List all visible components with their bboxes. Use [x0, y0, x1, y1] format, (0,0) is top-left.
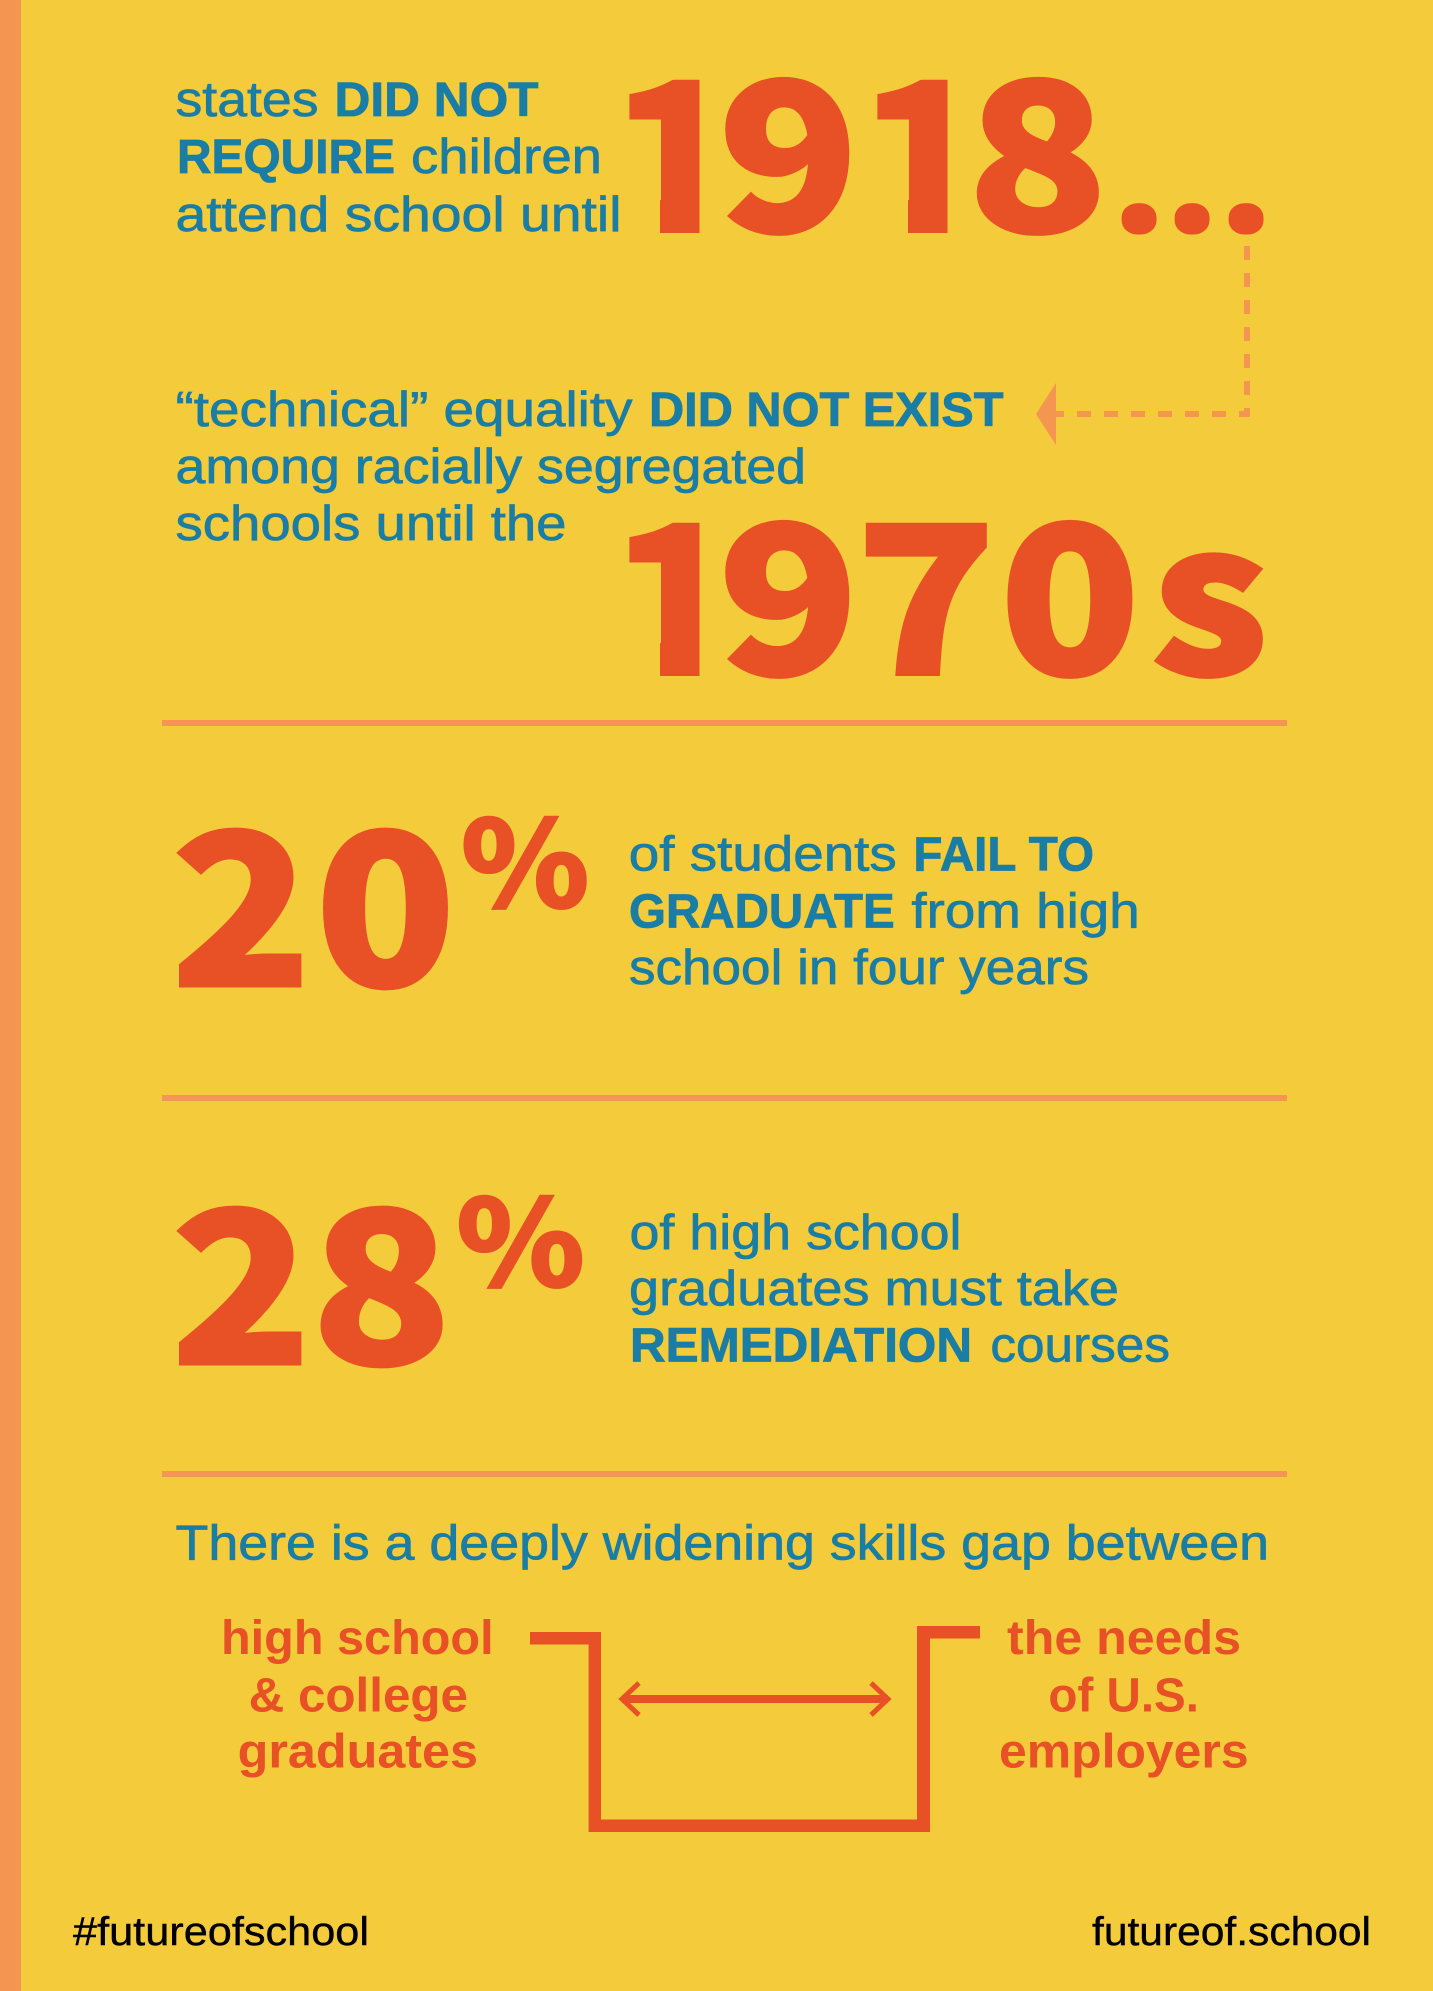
label: high school and college graduates: [221, 1612, 494, 1778]
big number: 1918: 1: [608, 0, 749, 292]
stat: 20 percent: 20: [171, 747, 456, 1046]
text: states did not require children attend school until: children: [411, 130, 602, 184]
text: 28 percent of graduates must take remediation: graduates must take: [629, 1262, 1119, 1316]
text: 20 percent of students fail to graduate: GRADUATE: [629, 886, 895, 939]
gap bracket: [530, 1626, 980, 1832]
text: 20 percent of students fail to graduate: [629, 828, 1140, 995]
label: high school and college graduates: & college: [249, 1670, 468, 1723]
text: 20 percent of students fail to graduate: of students: [629, 828, 897, 882]
text: technical equality did not exist among racially segregated schools until the: among racially segregated: [176, 440, 806, 494]
label: the needs of U.S. employers: of U.S.: [1048, 1670, 1199, 1723]
text: 28 percent of graduates must take remediation: [629, 1206, 1170, 1373]
text: states did not require children attend school until: [176, 73, 622, 242]
big number: 1970s: 970s: [718, 435, 1268, 735]
divider: [162, 720, 1287, 726]
text: 20 percent of students fail to graduate: from high: [911, 885, 1140, 939]
text: 28 percent of graduates must take remediation: REMEDIATION: [630, 1320, 972, 1373]
text: states did not require children attend school until: states: [176, 73, 318, 127]
big number: 1918: 9: [718, 0, 859, 292]
ellipsis dots: ...: [1136, 201, 1249, 225]
big number: 1970s: [629, 520, 1264, 679]
stat: 20 percent: %: [461, 769, 590, 943]
stat: 28 percent: %: [456, 1148, 585, 1322]
text: technical equality did not exist among racially segregated schools until the: DID NOT EXIST: [649, 384, 1004, 437]
left edge bar: [0, 0, 21, 1991]
stat: 28 percent: [171, 1125, 585, 1424]
text: states did not require children attend school until: DID NOT: [334, 74, 538, 127]
big number: 1970s: 1: [608, 435, 749, 735]
text: 20 percent of students fail to graduate: FAIL TO: [913, 829, 1094, 882]
stat: 20 percent: [171, 747, 590, 1046]
heading: skills gap: There is a deeply widening skills gap between: [176, 1516, 1269, 1570]
text: technical equality did not exist among racially segregated schools until the: [176, 383, 1004, 551]
text: 20 percent of students fail to graduate: school in four years: [629, 941, 1089, 995]
big number: 1918: 8: [967, 0, 1108, 292]
label: the needs of U.S. employers: the needs: [1007, 1612, 1241, 1665]
label: the needs of U.S. employers: [999, 1612, 1249, 1778]
text: technical equality did not exist among racially segregated schools until the: “technical” equality: [176, 383, 633, 437]
footer site: futureof.school: [1092, 1910, 1371, 1954]
stat: 28 percent: 28: [171, 1125, 452, 1424]
label: high school and college graduates: graduates: [238, 1726, 478, 1778]
text: technical equality did not exist among racially segregated schools until the: schools until the: [176, 497, 566, 551]
label: the needs of U.S. employers: employers: [999, 1726, 1249, 1778]
footer hashtag: #futureofschool: [73, 1910, 369, 1954]
divider: [162, 1095, 1287, 1101]
label: high school and college graduates: high school: [221, 1612, 494, 1665]
text: states did not require children attend school until: REQUIRE: [177, 131, 395, 184]
text: 28 percent of graduates must take remediation: courses: [990, 1319, 1170, 1373]
text: 28 percent of graduates must take remediation: of high school: [630, 1206, 962, 1260]
big number: 1918: [629, 76, 1099, 236]
text: states did not require children attend school until: attend school until: [176, 188, 622, 242]
big number: 1918: 1: [856, 0, 997, 292]
double arrow: [622, 1683, 888, 1715]
divider: [162, 1471, 1287, 1477]
dashed arrow from 1918 to 1970s: [1036, 246, 1247, 445]
